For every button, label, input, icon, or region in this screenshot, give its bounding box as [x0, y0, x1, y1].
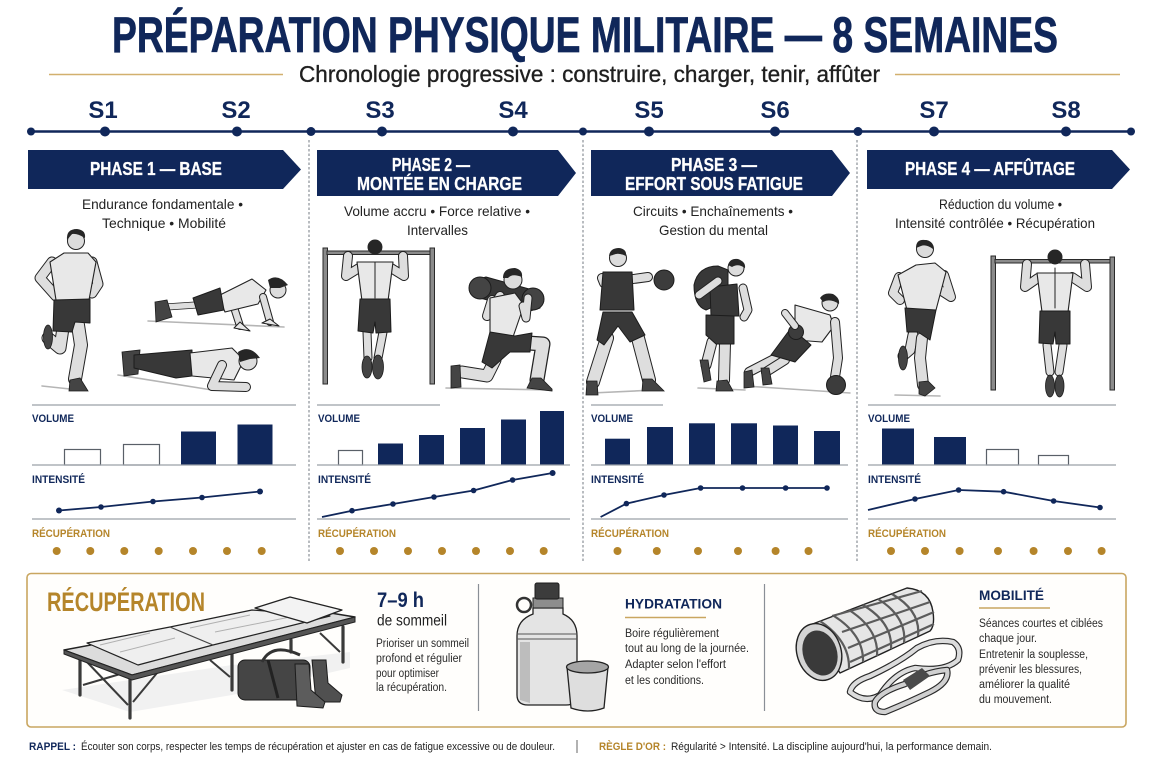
volume chart — [317, 405, 570, 465]
illustration: pull-up on bar — [991, 250, 1114, 397]
panel: recovery — [27, 574, 1126, 727]
phase 3 banner: PHASE 3 — — [671, 155, 757, 175]
timeline: weeks S1 to S8: S4 — [498, 97, 528, 124]
intensity chart: INTENSITÉ — [32, 473, 85, 486]
illustration: water bottle and cup — [517, 583, 608, 711]
phase 2 banner: MONTÉE EN CHARGE — [357, 173, 522, 194]
footer: golden rule: Régularité > Intensité. La discipline aujourd'hui, la performance demain. — [671, 741, 992, 753]
sleep duration: 7–9 h — [377, 589, 424, 612]
recovery dots: RÉCUPÉRATION — [318, 527, 396, 540]
intensity chart: INTENSITÉ — [318, 473, 371, 486]
mobility text: améliorer la qualité — [979, 679, 1070, 691]
mobility text: du mouvement. — [979, 694, 1052, 706]
hydration text: et les conditions. — [625, 675, 704, 687]
hydration text: tout au long de la journée. — [625, 643, 749, 655]
mobility text: prévenir les blessures, — [979, 664, 1082, 676]
phase 1 banner: PHASE 1 — BASE — [90, 159, 222, 179]
mobility text: Entretenir la souplesse, — [979, 649, 1088, 661]
illustration: ruck march — [694, 259, 748, 391]
illustration: runner — [893, 240, 951, 396]
illustration: sandbag lunge — [446, 268, 552, 391]
hydration text: Boire régulièrement — [625, 628, 720, 640]
phase 3 description — [633, 203, 793, 238]
phase 2 banner — [317, 150, 576, 196]
timeline: weeks S1 to S8: S1 — [88, 97, 118, 124]
illustration: kettlebell push-up row — [744, 294, 850, 394]
sleep text: Prioriser un sommeil — [376, 638, 469, 650]
volume chart — [32, 405, 296, 465]
recovery heading: RÉCUPÉRATION — [47, 586, 205, 617]
phase 4 banner: PHASE 4 — AFFÛTAGE — [905, 158, 1075, 179]
panel: phase 1 — [28, 150, 301, 555]
recovery dots: RÉCUPÉRATION — [868, 527, 946, 540]
timeline: weeks S1 to S8: S3 — [365, 97, 395, 124]
panel: phase 4 — [867, 150, 1130, 555]
hydration text — [625, 596, 749, 687]
volume chart — [591, 405, 848, 465]
phase 2 description — [344, 203, 530, 238]
sleep duration: de sommeil — [377, 612, 447, 630]
recovery dots — [868, 527, 1106, 555]
recovery dots: RÉCUPÉRATION — [591, 527, 669, 540]
phase 1 description — [82, 196, 243, 231]
subtitle: Chronologie progressive : construire, charger, tenir, affûter — [299, 61, 880, 87]
footer: reminder: RAPPEL : — [29, 741, 76, 753]
volume chart: VOLUME — [32, 413, 74, 425]
panel: phase 2 — [317, 150, 576, 555]
sleep text: pour optimiser — [376, 668, 439, 680]
volume chart — [868, 405, 1116, 465]
timeline: weeks S1 to S8: S8 — [1051, 97, 1081, 124]
recovery dots — [591, 527, 812, 555]
sleep text: la récupération. — [376, 682, 447, 694]
phase 2 banner: PHASE 2 — — [392, 155, 470, 175]
intensity chart: INTENSITÉ — [868, 473, 921, 486]
phase 4 description: Intensité contrôlée • Récupération — [895, 215, 1095, 231]
phase 4 banner — [867, 150, 1130, 189]
illustration: pull-up on bar — [323, 240, 434, 384]
mobility text: Séances courtes et ciblées — [979, 618, 1103, 630]
volume chart: VOLUME — [318, 413, 360, 425]
phase 4 description: Réduction du volume • — [939, 196, 1062, 212]
illustration: camp bed, bag and boots — [62, 597, 355, 718]
intensity chart — [32, 473, 296, 519]
volume chart: VOLUME — [868, 413, 910, 425]
timeline: weeks S1 to S8: S7 — [919, 97, 949, 124]
sleep text — [376, 638, 469, 694]
phase 3 banner: EFFORT SOUS FATIGUE — [625, 174, 803, 194]
phase 1 description: Technique • Mobilité — [102, 215, 226, 231]
phase 1 description: Endurance fondamentale • — [82, 196, 243, 212]
intensity chart: INTENSITÉ — [591, 473, 644, 486]
recovery dots — [32, 527, 266, 555]
intensity chart — [868, 473, 1116, 519]
hydration text: HYDRATATION — [625, 596, 722, 612]
panel: phase 3 — [586, 150, 850, 555]
phase 4 description — [895, 196, 1095, 231]
timeline: weeks S1 to S8 — [27, 97, 1135, 136]
sleep duration — [377, 589, 447, 630]
phase 3 description: Gestion du mental — [659, 222, 768, 238]
mobility text — [979, 587, 1103, 706]
footer: reminder: Écouter son corps, respecter les temps de récupération et ajuster en cas de fatigue excessive ou de douleur. — [81, 740, 555, 753]
phase 2 description: Intervalles — [407, 222, 468, 238]
intensity chart — [591, 473, 848, 519]
timeline: weeks S1 to S8: S2 — [221, 97, 251, 124]
phase 3 description: Circuits • Enchaînements • — [633, 203, 793, 219]
phase 2 description: Volume accru • Force relative • — [344, 203, 530, 219]
volume chart: VOLUME — [591, 413, 633, 425]
timeline: weeks S1 to S8: S5 — [634, 97, 664, 124]
footer: golden rule: RÈGLE D'OR : — [599, 740, 666, 753]
illustration: plank — [118, 348, 260, 390]
phase 1 banner — [28, 150, 301, 189]
mobility text: MOBILITÉ — [979, 587, 1044, 603]
intensity chart — [317, 470, 570, 519]
phase 3 banner — [591, 150, 850, 196]
timeline: weeks S1 to S8: S6 — [760, 97, 790, 124]
illustration: foam roller and strap — [789, 588, 959, 712]
hydration text: Adapter selon l'effort — [625, 659, 727, 671]
illustration: runner — [40, 229, 98, 391]
recovery dots — [318, 527, 548, 555]
sleep text: profond et régulier — [376, 653, 462, 665]
illustration: kettlebell swing with vest — [586, 248, 674, 395]
recovery dots: RÉCUPÉRATION — [32, 527, 110, 540]
illustration: push-up — [148, 277, 288, 331]
mobility text: chaque jour. — [979, 633, 1037, 645]
